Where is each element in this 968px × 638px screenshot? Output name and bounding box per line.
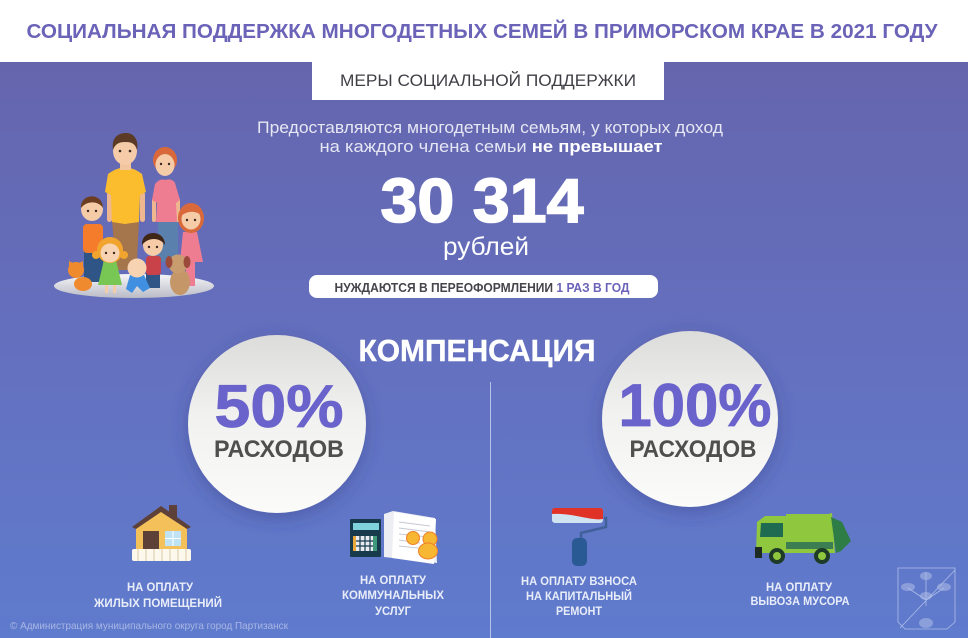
copyright footer: © Администрация муниципального округа город Партизанск — [10, 620, 288, 632]
baby — [126, 258, 150, 293]
label: capital repair: НА ОПЛАТУ ВЗНОСА — [521, 576, 637, 588]
circle: 100% — [602, 331, 778, 507]
mother — [152, 147, 180, 262]
icon: garbage truck — [755, 513, 851, 564]
intro text: Предоставляются многодетным семьям, у которых доход — [257, 118, 723, 137]
circle: 50% — [188, 335, 366, 513]
circle: 50%: 50% — [214, 373, 344, 440]
father — [105, 133, 146, 270]
icon: calculator and documents — [350, 511, 438, 564]
circle: 100%: 100% — [618, 372, 772, 439]
label: capital repair: РЕМОНТ — [556, 606, 602, 618]
circle: 50%: РАСХОДОВ — [214, 436, 344, 463]
circle: 100%: РАСХОДОВ — [630, 436, 756, 463]
renewal pill — [309, 275, 658, 298]
divider — [490, 382, 491, 638]
cat — [68, 261, 92, 291]
renewal pill: НУЖДАЮТСЯ В ПЕРЕОФОРМЛЕНИИ 1 РАЗ В ГОД — [334, 281, 630, 295]
label: garbage — [750, 582, 850, 608]
subtitle panel: МЕРЫ СОЦИАЛЬНОЙ ПОДДЕРЖКИ — [340, 71, 636, 90]
subtitle panel — [312, 62, 664, 100]
label: utilities — [342, 575, 444, 618]
older boy — [81, 196, 103, 282]
dog — [166, 254, 190, 295]
label: utilities: НА ОПЛАТУ — [360, 575, 427, 587]
label: utilities: КОММУНАЛЬНЫХ — [342, 590, 444, 602]
title: СОЦИАЛЬНАЯ ПОДДЕРЖКА МНОГОДЕТНЫХ СЕМЕЙ В ПРИМОРСКОМ КРАЕ В 2021 ГОДУ — [26, 19, 938, 43]
big number: 30 314 — [380, 167, 584, 236]
older girl — [178, 203, 204, 286]
intro text: на каждого члена семьи не превышает — [320, 137, 662, 156]
platform — [54, 274, 214, 298]
illustration: family — [54, 133, 214, 298]
label: garbage: НА ОПЛАТУ — [766, 582, 833, 594]
icon: coat of arms watermark — [898, 568, 955, 629]
intro text — [257, 118, 723, 156]
middle boy — [142, 233, 165, 288]
small girl — [92, 237, 128, 293]
label: capital repair — [521, 576, 637, 618]
icon: house — [132, 505, 191, 561]
label: housing — [93, 582, 222, 610]
header bar — [0, 0, 968, 62]
label: housing: НА ОПЛАТУ — [127, 582, 194, 594]
label: utilities: УСЛУГ — [375, 606, 411, 618]
compensation heading: КОМПЕНСАЦИЯ — [358, 333, 596, 368]
icon: paint roller — [552, 508, 606, 566]
label: capital repair: НА КАПИТАЛЬНЫЙ — [526, 590, 632, 603]
unit: рублей — [443, 233, 529, 261]
label: garbage: ВЫВОЗА МУСОРА — [750, 596, 850, 608]
label: housing: ЖИЛЫХ ПОМЕЩЕНИЙ — [93, 597, 222, 610]
